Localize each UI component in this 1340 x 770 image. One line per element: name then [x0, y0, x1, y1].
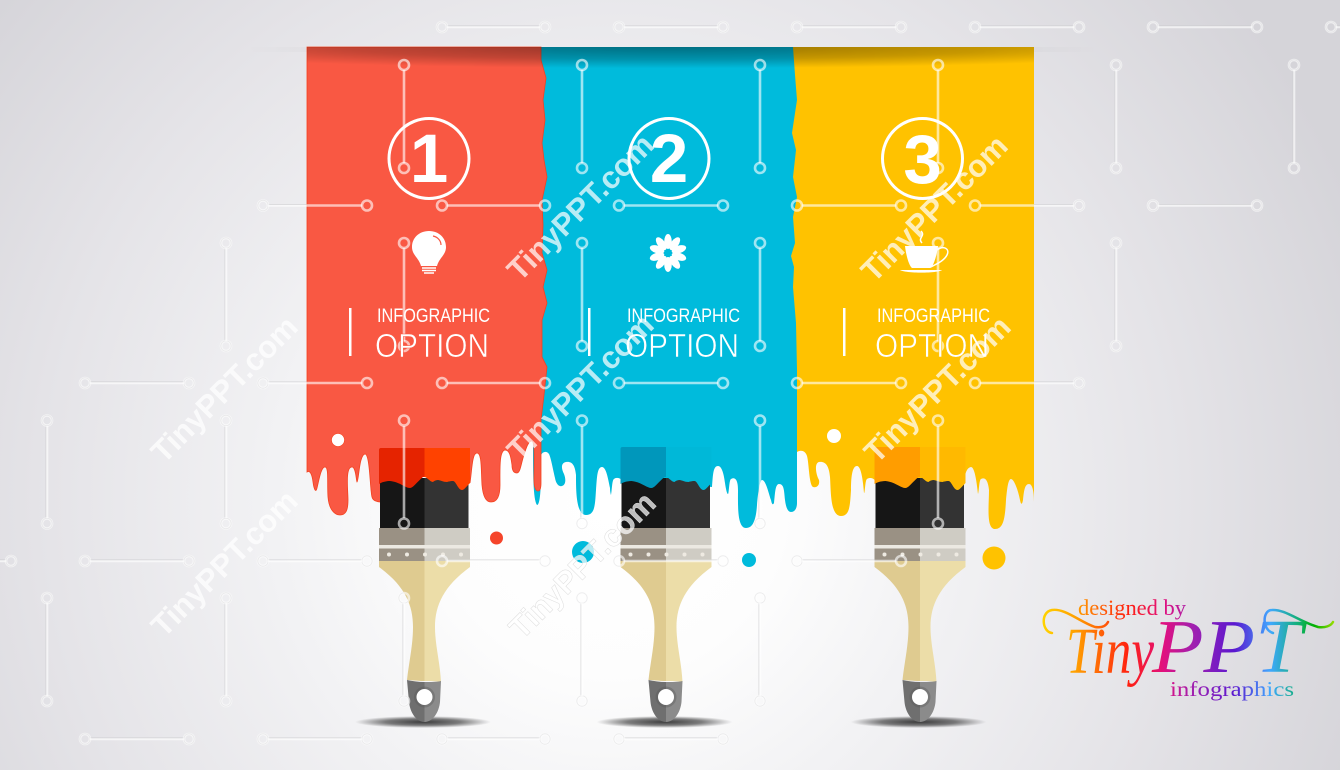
- logo: designed by TinyPPT infographics: infographics: [1170, 677, 1294, 701]
- icon: flower: [649, 234, 687, 272]
- watermarks: TinyPPT.com: [144, 483, 305, 644]
- number badge 1: 1: [410, 120, 448, 197]
- number badge 2: 2: [650, 120, 688, 197]
- option 2 label: OPTION: [625, 327, 739, 364]
- top shadow on paint: [307, 47, 1034, 69]
- paint droplets: [332, 429, 1006, 570]
- option 1 label: INFOGRAPHIC: [377, 306, 490, 327]
- option 2 label: INFOGRAPHIC: [627, 306, 740, 327]
- watermarks: TinyPPT.com: [500, 307, 661, 468]
- panel: red paint band: [307, 47, 547, 515]
- icon: coffee cup: [900, 231, 948, 273]
- icon: light bulb: [412, 231, 446, 273]
- option 3 label: OPTION: [875, 327, 989, 364]
- option 1 label: OPTION: [375, 327, 489, 364]
- number badge 1: [389, 118, 469, 198]
- brush 3: [850, 447, 986, 728]
- number badge 2: [629, 118, 709, 198]
- option 2 label: [588, 306, 740, 364]
- brush 2: [596, 447, 732, 728]
- logo: designed by TinyPPT infographics: [1044, 595, 1333, 701]
- logo: designed by TinyPPT infographics: PPT: [1151, 605, 1307, 689]
- top seam shadow: [245, 47, 1100, 52]
- number badge 3: 3: [903, 121, 942, 198]
- option 1 content: [349, 118, 490, 364]
- option 3 label: INFOGRAPHIC: [877, 306, 990, 327]
- option 1 label: [349, 306, 490, 364]
- number badge 3: [882, 118, 962, 198]
- watermarks: [144, 127, 1018, 646]
- option 2 content: [588, 118, 740, 364]
- watermarks: TinyPPT.com: [502, 485, 663, 646]
- watermarks: TinyPPT.com: [500, 127, 661, 288]
- logo: designed by TinyPPT infographics: Tiny: [1066, 615, 1155, 688]
- watermarks: TinyPPT.com: [854, 128, 1015, 289]
- option 3 content: [843, 118, 990, 364]
- logo: designed by TinyPPT infographics: designed by: [1078, 595, 1186, 620]
- panel: blue paint band: [520, 47, 797, 528]
- watermarks: TinyPPT.com: [857, 309, 1018, 470]
- panel: yellow paint band: [791, 47, 1034, 529]
- watermarks: TinyPPT.com: [144, 309, 305, 470]
- brush 1: [355, 448, 491, 728]
- option 3 label: [843, 306, 990, 364]
